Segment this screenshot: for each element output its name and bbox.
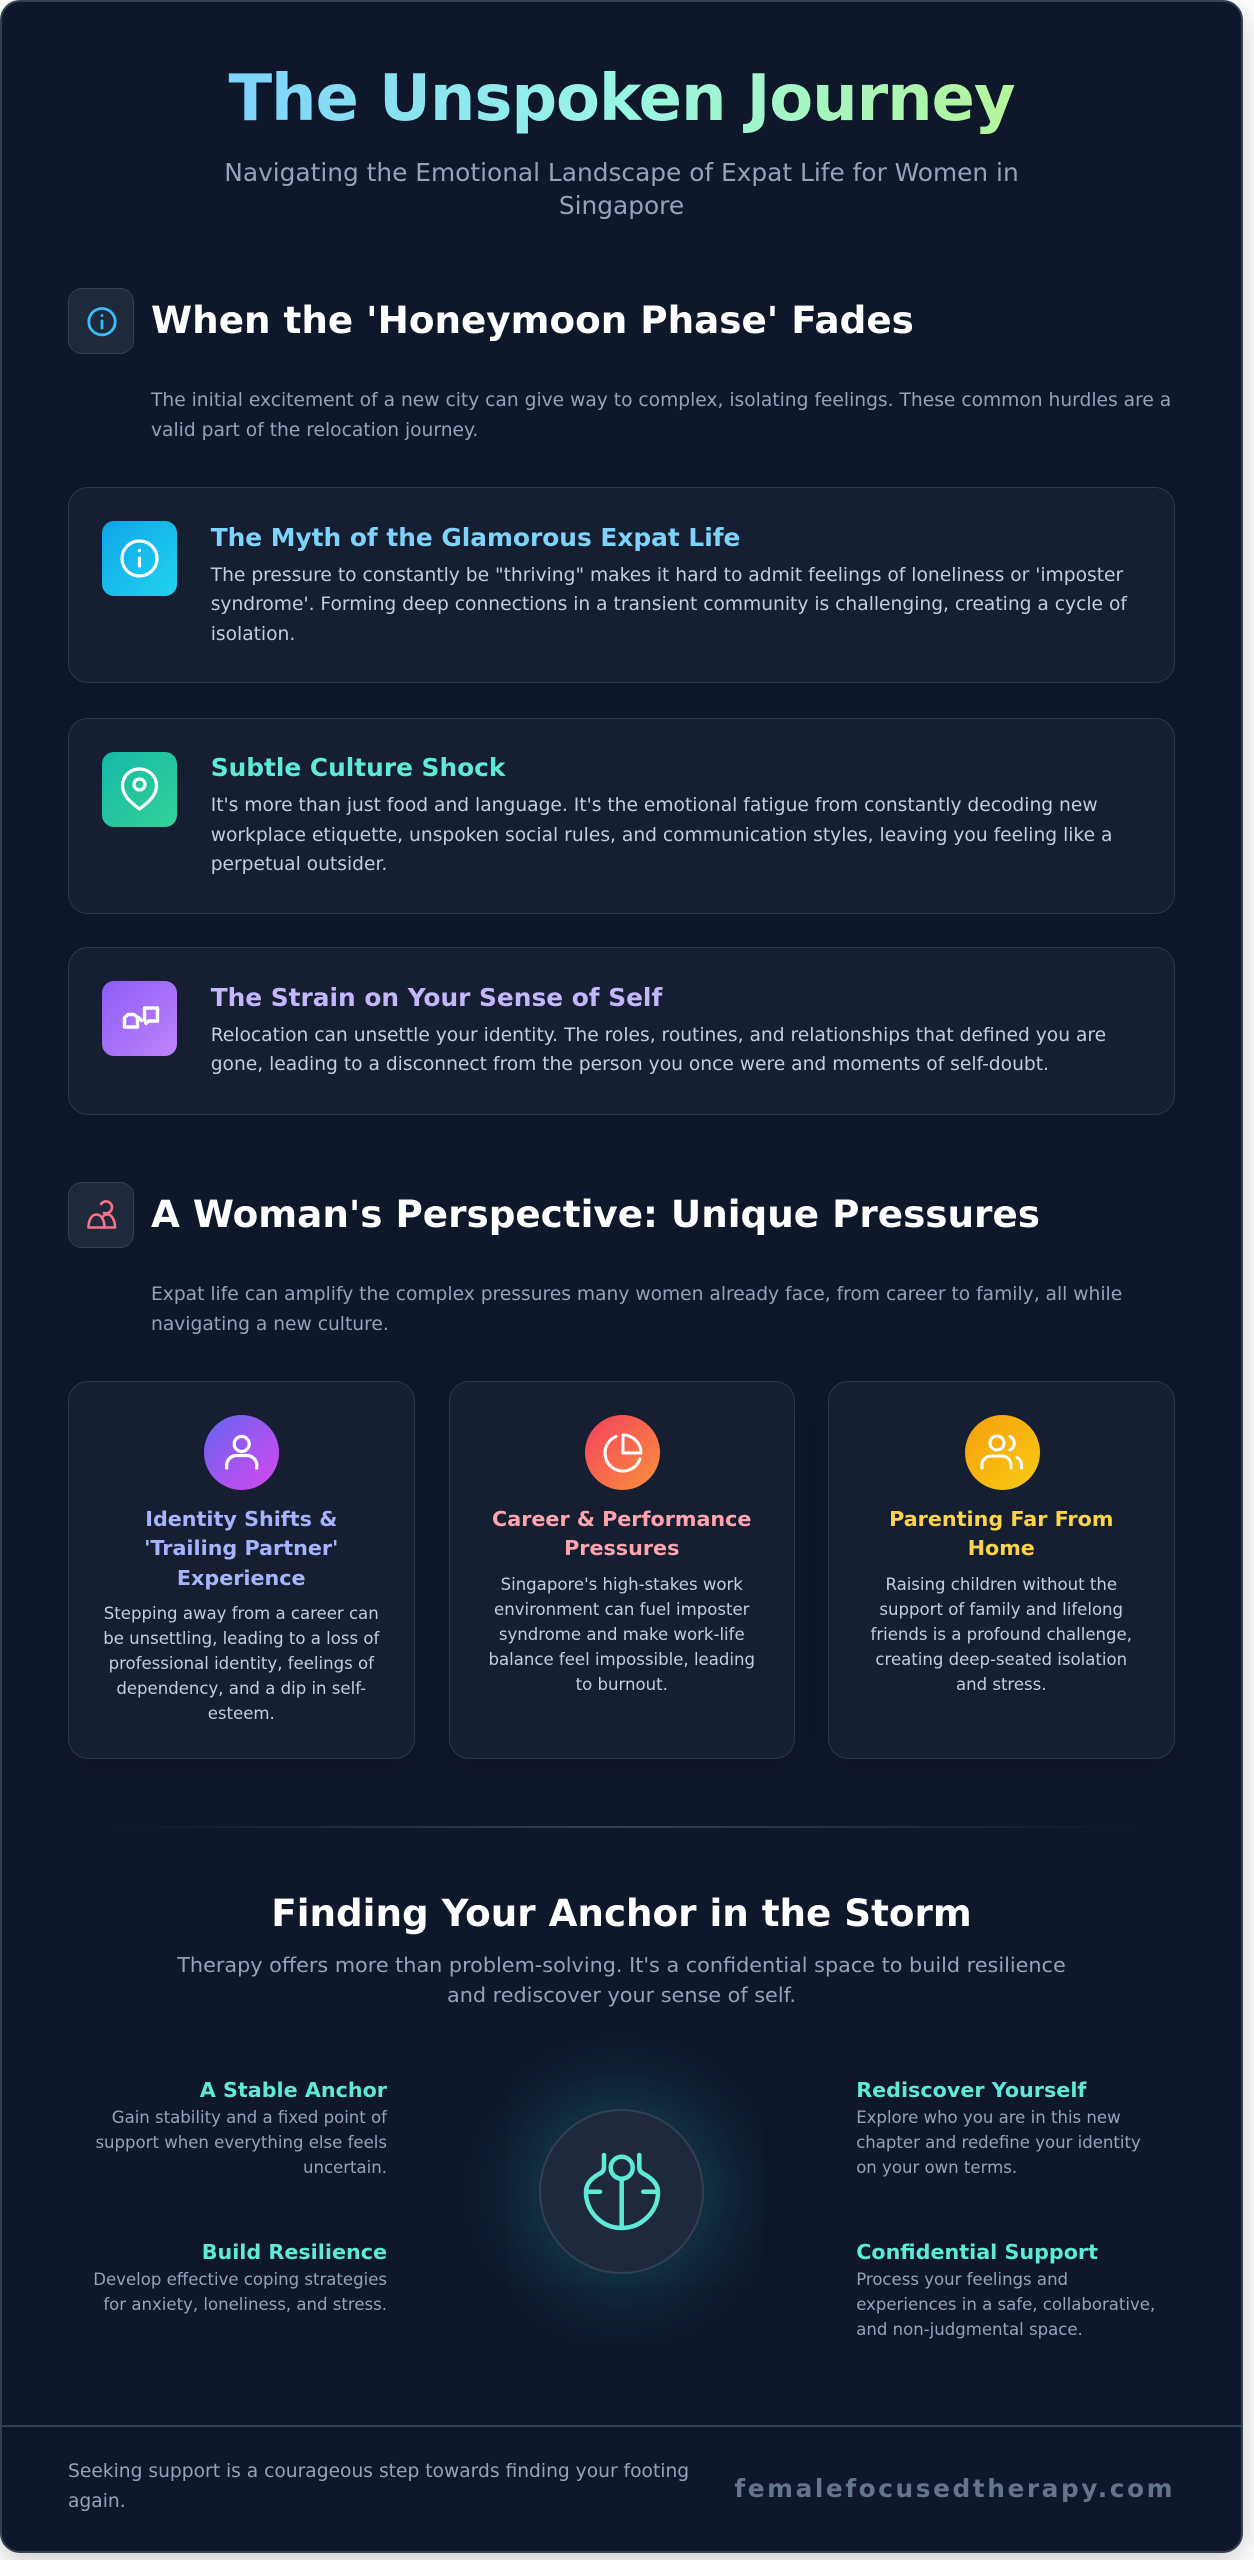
card text: dependency, and a dip in self- [116,1679,366,1698]
icon: map pin [102,752,177,826]
intro text: The initial excitement of a new city can give way to complex, isolating feelings. These common hurdles are a [151,390,1171,411]
benefit text: Explore who you are in this new [856,2108,1121,2127]
benefit text: Gain stability and a fixed point of [112,2108,387,2127]
card text: syndrome'. Forming deep connections in a transient community is challenging, creating a cycle of [211,594,1127,615]
benefit heading: Rediscover Yourself [856,2078,1086,2102]
card text: Relocation can unsettle your identity. The roles, routines, and relationships that defined you are [211,1025,1106,1046]
card text: workplace etiquette, unspoken social rules, and communication styles, leaving you feeling like a [211,825,1112,846]
anchor intro text: Therapy offers more than problem-solving. It's a confidential space to build resilience [177,1953,1066,1977]
card heading: 'Trailing Partner' [144,1536,338,1560]
card heading: Parenting Far From [889,1507,1113,1531]
card text [103,1604,380,1723]
panel: career pressures [448,1381,795,1759]
card text [211,1025,1106,1075]
heading: When the 'Honeymoon Phase' Fades [151,298,914,342]
panel: strain on sense of self [68,947,1175,1115]
panel: parenting far from home [828,1381,1174,1759]
benefit text: uncertain. [303,2158,387,2177]
card text: perpetual outsider. [211,854,387,875]
card heading: Pressures [564,1536,679,1560]
card heading [144,1507,338,1590]
panel: glamorous expat myth [68,487,1175,683]
card text: It's more than just food and language. It's the emotional fatigue from constantly decoding new [211,795,1098,816]
icon: info [68,288,134,354]
benefit text: support when everything else feels [95,2133,387,2152]
footer website: femalefocusedtherapy.com [734,2474,1175,2503]
card text: Raising children without the [885,1575,1117,1594]
benefit heading: Confidential Support [856,2240,1098,2264]
card text: Singapore's high-stakes work [501,1575,743,1594]
benefit: a stable anchor [95,2078,388,2177]
card text: to burnout. [576,1675,668,1694]
card heading: The Strain on Your Sense of Self [211,983,662,1012]
panel: identity shifts [68,1381,414,1759]
card text: balance feel impossible, leading [489,1650,755,1669]
intro text [151,1284,1122,1335]
icon: person [204,1415,279,1490]
card text [489,1575,755,1694]
card text: The pressure to constantly be "thriving" makes it hard to admit feelings of loneliness or 'imposter [211,565,1123,586]
subtitle: Navigating the Emotional Landscape of Expat Life for Women in [224,158,1019,187]
card text: gone, leading to a disconnect from the person you once were and moments of self-doubt. [211,1054,1049,1075]
card text: esteem. [208,1704,275,1723]
card text [870,1575,1132,1694]
heading: finding your anchor: Finding Your Anchor in the Storm [271,1891,972,1935]
intro text: Expat life can amplify the complex pressures many women already face, from career to family, all while [151,1284,1122,1305]
icon: linked shapes [102,981,177,1056]
heading: A Woman's Perspective: Unique Pressures [151,1192,1040,1236]
panel: subtle culture shock [68,718,1175,914]
benefit text: Process your feelings and [856,2270,1068,2289]
benefit text: on your own terms. [856,2158,1017,2177]
card heading: Subtle Culture Shock [211,753,505,782]
benefit text: for anxiety, loneliness, and stress. [103,2295,387,2314]
benefit: rediscover yourself [856,2078,1141,2177]
icon: info [102,521,177,596]
subtitle: Singapore [559,191,684,220]
card heading: Experience [177,1566,306,1590]
card heading [889,1507,1113,1560]
card text: support of family and lifelong [879,1600,1123,1619]
card text [211,795,1112,875]
footer message: again. [68,2490,126,2512]
benefit text [856,2270,1155,2339]
benefit text [856,2108,1141,2177]
card text: professional identity, feelings of [109,1654,374,1673]
title: The Unspoken Journey [228,62,1014,136]
anchor intro text [177,1953,1066,2006]
card text: and stress. [956,1675,1047,1694]
card text: syndrome and make work-life [499,1625,745,1644]
card text: be unsettling, leading to a loss of [103,1629,379,1648]
section heading: honeymoon phase [68,288,1171,441]
card heading: Identity Shifts & [145,1507,337,1531]
icon: people [68,1182,134,1248]
central icon: glowing anchor [539,2109,704,2274]
benefit text: and non-judgmental space. [856,2320,1083,2339]
card heading: Career & Performance [492,1507,751,1531]
footer message [68,2460,689,2512]
footer message: Seeking support is a courageous step towards finding your footing [68,2460,689,2482]
icon: two people [964,1415,1040,1490]
card text: environment can fuel imposter [494,1600,749,1619]
intro text: valid part of the relocation journey. [151,420,478,441]
icon: pie chart [584,1415,660,1490]
section heading: woman's perspective [68,1182,1122,1335]
benefit text [93,2270,387,2314]
subtitle [224,158,1019,220]
card heading: The Myth of the Glamorous Expat Life [211,523,740,552]
benefit heading: A Stable Anchor [200,2078,387,2102]
card text: creating deep-seated isolation [875,1650,1127,1669]
benefit: build resilience [93,2240,387,2314]
card text: friends is a profound challenge, [871,1625,1132,1644]
anchor intro text: and rediscover your sense of self. [447,1982,796,2006]
benefit text: Develop effective coping strategies [93,2270,387,2289]
benefit heading: Build Resilience [202,2240,387,2264]
benefit text: chapter and redefine your identity [856,2133,1141,2152]
card heading: Home [968,1536,1035,1560]
card heading [492,1507,751,1560]
card text: Stepping away from a career can [104,1604,379,1623]
benefit: confidential support [856,2240,1155,2339]
intro text: navigating a new culture. [151,1314,389,1335]
benefit text: experiences in a safe, collaborative, [856,2295,1155,2314]
benefit text [95,2108,388,2177]
intro text [150,390,1171,441]
card text: isolation. [211,624,295,645]
card text [210,565,1128,645]
